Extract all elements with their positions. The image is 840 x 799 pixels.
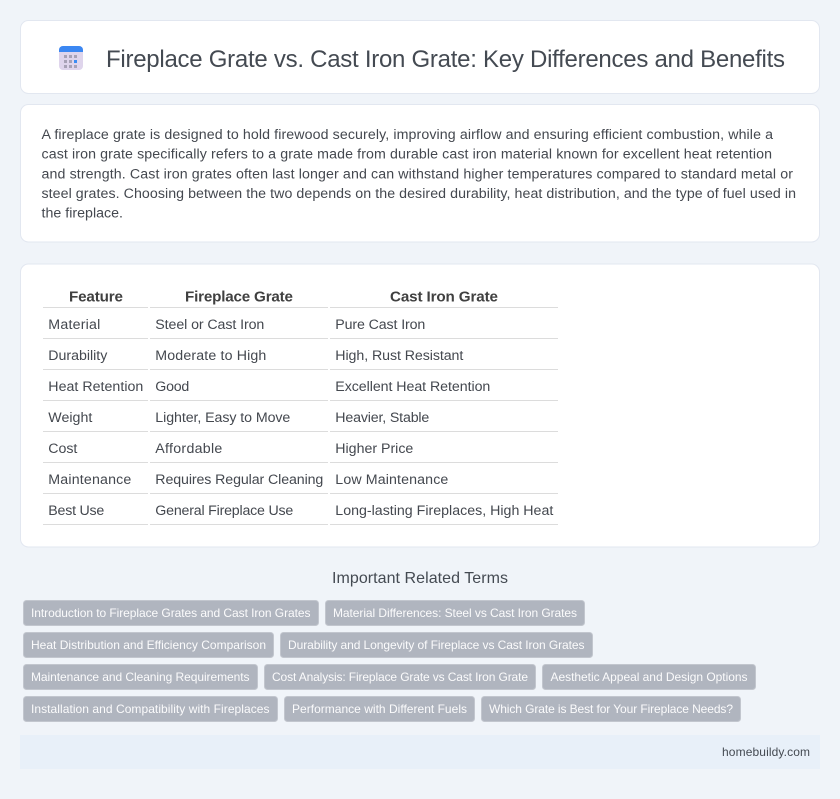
- related terms chips: Performance with Different Fuels: [292, 702, 467, 716]
- table rows: Good: [155, 379, 189, 395]
- table rows: Maintenance: [48, 472, 131, 488]
- related terms chips: [24, 600, 756, 722]
- table rows: Long-lasting Fireplaces, High Heat: [335, 503, 553, 519]
- panel: description: [20, 104, 820, 242]
- related terms chips: Which Grate is Best for Your Fireplace Needs?: [489, 702, 733, 716]
- table rows: Pure Cast Iron: [335, 317, 425, 333]
- table header: Fireplace Grate: [185, 289, 293, 306]
- table rows: Higher Price: [335, 441, 413, 457]
- icon: calendar: [59, 46, 83, 70]
- table rows: High, Rust Resistant: [335, 348, 463, 364]
- footer brand: homebuildy.com: [722, 745, 810, 759]
- table header: Feature: [69, 289, 123, 306]
- text block: description: the fireplace.: [42, 206, 123, 222]
- related terms chips: Maintenance and Cleaning Requirements: [31, 670, 250, 684]
- related terms chips: Heat Distribution and Efficiency Comparison: [31, 638, 266, 652]
- related terms chips: Durability and Longevity of Fireplace vs Cast Iron Grates: [288, 638, 584, 652]
- text block: description: A fireplace grate is designed to hold firewood securely, improving airflow and ensuring efficient combustion, while a: [42, 127, 773, 143]
- related terms chips: Introduction to Fireplace Grates and Cast Iron Grates: [31, 606, 310, 620]
- related terms chips: Aesthetic Appeal and Design Options: [550, 670, 748, 684]
- table rows: Requires Regular Cleaning: [155, 472, 323, 488]
- table rows: [43, 307, 558, 525]
- table rows: Lighter, Easy to Move: [155, 410, 290, 426]
- table rows: Affordable: [155, 441, 222, 457]
- panel: comparison table: [20, 264, 820, 547]
- table rows: Excellent Heat Retention: [335, 379, 490, 395]
- text block: description: [42, 127, 796, 222]
- table rows: General Fireplace Use: [155, 503, 293, 519]
- table rows: Best Use: [48, 503, 104, 519]
- text block: description: cast iron grate specifically refers to a grate made from durable cast iron material known for excellent heat retention: [42, 147, 772, 163]
- table rows: Cost: [48, 441, 77, 457]
- related terms chips: Installation and Compatibility with Fireplaces: [31, 702, 270, 716]
- heading: related terms: Important Related Terms: [332, 570, 508, 587]
- panel: header: [20, 20, 820, 94]
- table header: Cast Iron Grate: [390, 289, 498, 306]
- table header: [69, 289, 498, 306]
- footer: [20, 735, 820, 769]
- table rows: Heavier, Stable: [335, 410, 429, 426]
- table rows: Low Maintenance: [335, 472, 448, 488]
- related terms chips: Cost Analysis: Fireplace Grate vs Cast Iron Grate: [272, 670, 528, 684]
- table rows: Steel or Cast Iron: [155, 317, 264, 333]
- table rows: Moderate to High: [155, 348, 266, 364]
- table rows: Material: [48, 317, 100, 333]
- table rows: Weight: [48, 410, 92, 426]
- text block: description: steel grates. Choosing between the two depends on the desired durability, heat distribution, and the type of fuel used in: [42, 186, 796, 202]
- table rows: Durability: [48, 348, 108, 364]
- title: Fireplace Grate vs. Cast Iron Grate: Key Differences and Benefits: [106, 46, 785, 73]
- text block: description: and strength. Cast iron grates often last longer and can withstand higher temperatures compared to standard metal or: [42, 166, 793, 182]
- table rows: Heat Retention: [48, 379, 143, 395]
- related terms chips: Material Differences: Steel vs Cast Iron Grates: [333, 606, 577, 620]
